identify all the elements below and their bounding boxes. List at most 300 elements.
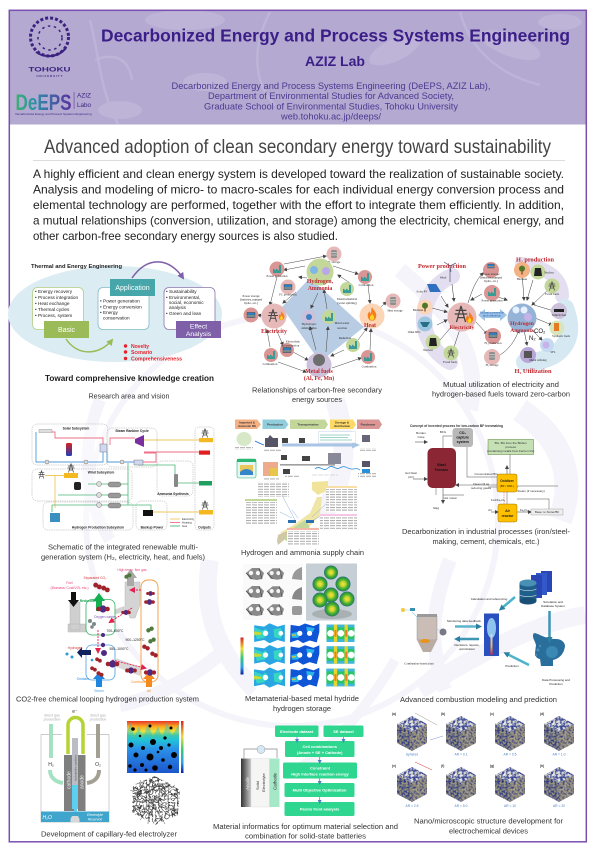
node: power storage: hydro, etc.) — [244, 301, 258, 306]
caption — [252, 386, 382, 404]
subsystem outlines — [32, 424, 214, 530]
process labels: (Air) — [408, 475, 414, 479]
panel: capillary-fed electrolyzer: H₂ — [48, 762, 54, 768]
process labels: Coke — [417, 435, 425, 439]
box: application: • Power generation — [100, 298, 140, 304]
box: CO2 capture system: system — [457, 440, 469, 444]
H2 gas tube — [50, 724, 63, 783]
chevron headers: Production — [267, 422, 283, 426]
labels: direct gas — [90, 714, 106, 718]
annotation lines — [415, 713, 443, 770]
panel: integrated renewable multi-generation schematic — [32, 424, 214, 562]
heading: Concept of invented process for low-carbon BF ironmaking — [410, 424, 503, 428]
node: power generation — [266, 262, 288, 278]
caption: electrochemical devices — [449, 826, 528, 836]
intro paragraph — [33, 167, 564, 243]
box: effect analysis: social, economic — [169, 300, 204, 305]
legend: Electricity — [182, 517, 195, 521]
panel: capillary-fed electrolyzer: H₂O — [42, 815, 52, 821]
panel: capillary-fed electrolyzer: hydrophilic capillary — [74, 754, 78, 781]
labels: direct gas — [44, 714, 60, 718]
node: fossil fuels top — [544, 278, 560, 296]
caption: Metamaterial-based metal hydride — [245, 694, 359, 703]
labels: CO2 and N2: CO₂ — [534, 329, 546, 335]
node: combustion top — [358, 270, 374, 287]
panel: decarbonization in industrial processes — [402, 424, 570, 546]
node: hydrogen ammonia: Ammonia — [308, 286, 332, 292]
box: application: • Energy — [100, 310, 118, 315]
heading: H2 production: H₂ production — [516, 258, 555, 264]
node: thermochemical water splitting: Thermochemical — [337, 297, 357, 301]
node: power generation — [481, 285, 503, 302]
logo: DeEPS AZIZ Labo: DeEPS — [16, 90, 72, 115]
labels: (Biomass/ Coal/VOL etc.) — [50, 586, 89, 590]
node: power storage — [240, 294, 263, 322]
box: basic — [32, 288, 89, 338]
flowchart — [275, 726, 364, 816]
process labels: reducing gases — [471, 486, 492, 490]
caption: energy sources — [292, 395, 342, 404]
supply chain row 1 — [235, 432, 376, 452]
box: blast furnace — [428, 448, 456, 488]
caption: combination for solid-state batteries — [245, 832, 366, 840]
box: CO2 capture system: CO₂ — [459, 431, 467, 435]
process labels: Fe3/Fe₂O₃ — [491, 498, 506, 502]
step: cell combinations — [285, 741, 354, 757]
panel letters: (f) — [441, 764, 444, 768]
step: cell combinations: Cell combinations — [302, 744, 338, 749]
node: metal refining: Metal refining — [529, 358, 547, 362]
box: effect analysis: • Sustainability — [166, 289, 197, 294]
node: hydrotreat: Hydrotropic — [302, 322, 317, 326]
process lines — [413, 442, 531, 512]
labels: Decisions, layouts, — [454, 643, 480, 647]
node: thermochemical water splitting: (water splitting) — [337, 301, 357, 305]
electrodes — [64, 738, 86, 822]
box: oxidizer — [497, 474, 517, 492]
node: biomass: Biomass — [413, 308, 424, 312]
caption: Decarbonization in industrial processes (iron/steel- — [402, 527, 570, 536]
labels: production — [44, 718, 60, 722]
labels: Simulation and — [543, 600, 563, 604]
node: fossil fuels top: Fossil fuels — [545, 292, 560, 296]
text: Tohoku University: UNIVERSITY — [36, 74, 63, 78]
colour bar — [240, 638, 244, 674]
panel letters: (e) — [392, 764, 396, 768]
aspect ratio labels: AR = 0.1 — [455, 752, 468, 756]
panel: metamaterial-based metal hydride storage — [240, 564, 359, 713]
process labels: Clean Oil as — [473, 482, 490, 486]
node: combustion left: Combustion — [263, 362, 278, 366]
affiliation text: Graduate School of Environmental Studies, Tohoku University — [204, 101, 458, 111]
step: constraints: High interface reaction energy — [291, 772, 350, 776]
panel: CO2-free chemical looping hydrogen production — [16, 568, 199, 704]
node: wind: Wind — [440, 276, 447, 280]
node: hydrogen ammonia — [306, 258, 334, 292]
panel: mutual utilization of electricity and hydrogen — [408, 258, 571, 398]
box: reduction reactor — [86, 600, 115, 635]
node: biomass top — [514, 262, 530, 281]
node: hydrogen ammonia: Hydrogen, — [307, 279, 334, 285]
box: application: conservation — [103, 316, 130, 320]
subsystem titles: Hydrogen Production Subsystem — [72, 526, 124, 530]
heading: power production: Power production — [418, 264, 467, 270]
step: constraints — [283, 762, 357, 778]
labels: optimization — [459, 647, 475, 651]
node: electricity: Electricity — [261, 329, 287, 335]
reactors — [68, 582, 141, 672]
caption: Schematic of the integrated renewable multi- — [48, 542, 198, 552]
flame simulation — [484, 614, 499, 656]
chevron headers: Storage & — [335, 420, 350, 424]
node: vehicle fuel: Vehicle fuel — [552, 313, 566, 317]
arrow: basic to application — [66, 339, 112, 352]
box: CO2 capture system: capture — [456, 436, 469, 440]
fibre network render — [130, 776, 180, 825]
caption: Development of capillary-fed electrolyzer — [41, 830, 177, 838]
process labels: Hot metal — [444, 496, 457, 500]
aspect ratio labels: AR = 20 — [553, 804, 565, 808]
caption: generation system (H₂, electricity, heat, and fuels) — [41, 552, 205, 562]
node: H2 production: H₂ production — [485, 341, 502, 345]
logo: DeEPS AZIZ Labo: Labo — [77, 103, 92, 109]
labels: 900–1200°C — [126, 638, 145, 642]
node: nuclear: Nuclear — [423, 348, 433, 352]
caption — [245, 694, 359, 713]
step: multi objective optimization: Multi Objective Optimization — [293, 788, 347, 792]
step: constraints: Constraint — [310, 766, 331, 770]
caption: Material informatics for optimum material selection and — [213, 822, 398, 831]
node: SFL: SFL — [550, 350, 556, 354]
box: BG / BG source — [487, 440, 534, 454]
map of Japan — [277, 481, 330, 545]
labels: Hydrogen — [68, 646, 82, 650]
box: effect analysis: analysis — [169, 305, 187, 310]
list: novelty scenario comprehensiveness: Scenario — [131, 350, 152, 356]
intro paragraph: a mutual relationships (conversion, utilization, and storage) among the electricity, chemical energy, and — [33, 213, 564, 227]
icon: Tohoku University emblem — [30, 18, 68, 56]
lab name: AZIZ Lab — [305, 54, 365, 69]
chevron headers — [235, 420, 382, 429]
box: application: • Energy conversion — [100, 304, 142, 310]
chevron headers: Imported & — [239, 420, 256, 424]
caption: making, cement, chemicals, etc.) — [432, 537, 540, 546]
node: synthetic fuels: Synthetic fuels — [552, 334, 571, 338]
node: H2 storage: H₂ storage — [328, 260, 341, 264]
node: electricity: Electricity — [450, 325, 475, 331]
node: metal refining — [520, 347, 547, 363]
node: synthetic fuels — [550, 320, 571, 338]
arrow: mutual conversion and utilization: and utilization — [483, 314, 501, 318]
labels: 550–1000°C — [110, 647, 129, 651]
arrow: mutual conversion and utilization: Mutual conversion — [480, 310, 504, 314]
labels: Separated CO₂ — [84, 576, 107, 580]
O2 gas tube — [87, 724, 99, 783]
labels — [50, 568, 152, 693]
panel: advanced combustion modeling and prediction — [400, 571, 570, 704]
node: metal-water reaction: reaction — [337, 326, 347, 330]
node: biomass top: Biomass — [517, 277, 528, 281]
node: H2 production — [485, 328, 502, 345]
box: BG / BG source: process — [505, 445, 516, 449]
stress simulation render — [306, 564, 357, 620]
step: cell combinations: (Anode + SE + Cathode) — [297, 750, 343, 755]
box: basic: • Thermal cycles — [35, 307, 70, 312]
battery schematic — [241, 746, 280, 807]
labels: Combustion — [131, 680, 149, 684]
database icon — [520, 571, 552, 604]
caption: hydrogen-based fuels toward zero-carbon — [432, 390, 570, 398]
box: effect analysis: Effect — [190, 324, 207, 330]
aspect ratio labels: AR = 2.5 — [406, 804, 419, 808]
process labels — [405, 430, 545, 512]
aspect ratio labels: AR = 10 — [504, 804, 516, 808]
box: basic: Basic — [58, 327, 76, 334]
molecules — [66, 573, 158, 677]
affiliation text: Decarbonized Energy and Process Systems Engineering (DeEPS, AZIZ Lab), — [172, 81, 490, 91]
caption: Hydrogen and ammonia supply chain — [241, 548, 364, 557]
panel: nano/microscopic structure development — [392, 712, 574, 836]
subsystem titles: Steam Rankine Cycle — [115, 429, 149, 433]
labels: Calculation and referencing — [471, 597, 508, 601]
node: power generation: Power generation — [266, 274, 288, 278]
chevron headers: Transportation — [297, 422, 319, 426]
process labels: Slag — [433, 506, 439, 510]
panel letters: (a) — [392, 712, 396, 716]
node: metal-water reaction: Metal-water — [335, 321, 349, 325]
aspect ratio labels — [406, 752, 566, 808]
box: effect analysis: • Environmental, — [166, 295, 200, 300]
affiliation text — [172, 81, 490, 122]
node: combustion right — [361, 350, 377, 368]
legend: Gas — [182, 524, 188, 528]
panel letters — [392, 712, 544, 768]
labels: Air — [147, 689, 152, 693]
process labels: Hot blast — [405, 471, 417, 475]
node: nuclear top — [530, 264, 554, 280]
box: air reactor: reactor — [502, 514, 514, 518]
caption: Advanced combustion modeling and prediction — [400, 695, 557, 704]
labels: High temp. flue gas — [117, 568, 147, 572]
box: basic: • Heat exchange — [35, 301, 70, 306]
intro paragraph: A highly efficient and clean energy system is developed toward the realization of sustainable society. — [33, 167, 564, 181]
panel: capillary-fed electrolyzer: e⁻ — [72, 709, 78, 715]
box: air reactor — [498, 504, 517, 522]
node: electrolytic fuel production: Electrolytic — [286, 340, 301, 344]
node: power storage: (batteries, pumped — [480, 276, 503, 280]
node: combustion right: Combustion — [362, 364, 377, 368]
labels: Reduction — [80, 599, 96, 603]
subsystem titles: Ammonia Synthesis — [157, 492, 189, 496]
chevron headers: Purchaser — [361, 422, 376, 426]
chevron headers: domestic RE — [238, 424, 256, 428]
node: FC production — [279, 280, 297, 296]
caption: hydrogen storage — [273, 704, 331, 713]
panel: capillary-fed electrolyzer: Electrolyte — [87, 813, 103, 817]
box: application: Application — [115, 285, 150, 292]
node: fossil fuels — [443, 346, 458, 364]
process labels: Burden — [416, 431, 426, 435]
process labels: Fe₂O₃ — [520, 508, 529, 512]
step: SE dataset: SE dataset — [333, 729, 354, 734]
labels: Prediction — [505, 664, 519, 668]
yellow-green conductor — [68, 718, 83, 754]
node: electricity — [448, 302, 476, 332]
list: novelty scenario comprehensiveness — [124, 344, 182, 362]
node: power storage: Power storage — [482, 272, 500, 276]
node: SFL — [540, 338, 556, 354]
step: pareto front analysis: Pareto front analysis — [300, 806, 340, 812]
chevron headers: distribution — [334, 424, 350, 428]
subsystem titles: Wind Subsystem — [88, 470, 114, 474]
panel: capillary-fed electrolyzer: anode — [80, 775, 86, 789]
arrow: mutual conversion and utilization — [478, 309, 507, 321]
intro paragraph: Analysis and modeling of micro- to macro-scales for each individual energy conversion process and — [33, 182, 564, 196]
panel: carbon-free secondary energy relationships — [240, 246, 403, 404]
node: electrolytic fuel production — [280, 340, 301, 357]
tank outline — [41, 734, 109, 822]
flow arrows — [297, 737, 344, 802]
node: solar PV — [417, 284, 441, 294]
gas lines — [52, 463, 199, 512]
box: BG / BG source: BG, BG from the Bishen — [495, 441, 527, 445]
node: hydrotreat: aldehydrides — [301, 326, 317, 330]
caption: Relationships of carbon-free secondary — [252, 386, 382, 394]
node: wind — [440, 262, 456, 282]
caption — [414, 816, 563, 836]
labels: Monitoring data feedback — [447, 619, 481, 623]
panel letters: (d) — [540, 712, 544, 716]
node: heat — [360, 304, 384, 329]
legend: Heating — [182, 520, 192, 524]
node: metal fuels: (Al, Fe, Mn) — [304, 375, 334, 382]
node: power storage: hydro, etc.) — [484, 279, 498, 284]
electricity lines — [45, 440, 199, 512]
legend — [170, 517, 195, 528]
head icon — [533, 633, 565, 666]
box: base to sinter — [531, 509, 563, 515]
box: combustor — [141, 580, 158, 682]
background bands — [424, 264, 569, 362]
box: effect analysis — [164, 288, 221, 338]
text: Tohoku University — [28, 66, 71, 78]
box: blast furnace: Blast — [437, 463, 447, 467]
node: nuclear — [423, 334, 440, 352]
labels: CO2 and N2 — [529, 329, 546, 342]
connection arrows — [258, 256, 386, 372]
aspect ratio labels: AR = 0.5 — [504, 752, 517, 756]
node: hydrogen ammonia — [508, 304, 536, 334]
box: basic: • Process integration — [35, 295, 78, 300]
node: power generation: Power generation — [481, 298, 503, 302]
logo: DeEPS AZIZ Labo: Decarbonized Energy and Process Systems Engineering — [16, 113, 92, 116]
box: CO2 capture system — [452, 428, 473, 447]
panel letters: (b) — [441, 712, 445, 716]
node: reduction: Reduction — [339, 336, 352, 340]
affiliation text: web.tohoku.ac.jp/deeps/ — [280, 112, 381, 122]
labels: CO2 and N2: N₂ — [529, 336, 536, 342]
caption — [41, 542, 205, 562]
box: effect analysis: Analysis — [186, 331, 212, 338]
node: metal fuels — [304, 352, 334, 382]
arrows — [455, 597, 550, 665]
box: air reactor: Air — [505, 509, 511, 513]
battery schematic: Cathode — [272, 772, 278, 790]
caption: Research area and vision — [88, 392, 170, 400]
caption — [432, 380, 570, 398]
panel letters: (c) — [490, 712, 494, 716]
box: application — [98, 279, 155, 330]
intro paragraph: elemental technology are performed, together with the effort to integrate them efficiently. In addition, — [33, 198, 564, 212]
node: H2 storage — [326, 246, 342, 264]
list: novelty scenario comprehensiveness: Comprehensiveness — [131, 356, 182, 362]
panel: capillary-fed electrolyzer: O₂ — [95, 762, 101, 768]
node: hydrogen ammonia: Hydrogen — [510, 321, 535, 327]
aspect ratio labels: AR = 1.0 — [553, 752, 566, 756]
caption — [213, 822, 398, 840]
node: biomass — [413, 300, 432, 314]
labels: Prediction — [549, 682, 563, 686]
process labels: Air — [488, 508, 492, 512]
water pipes — [36, 432, 134, 462]
labels: Data Processing and — [542, 678, 570, 682]
heading: H2 utilization: H₂ Utilization — [514, 369, 552, 375]
node: electrolytic fuel production: fuel production — [281, 344, 300, 348]
affiliation text: Department of Environmental Studies for Advanced Society, — [208, 91, 454, 101]
intro paragraph: other carbon-free secondary energy sources is also studied. — [33, 229, 338, 243]
box: blast furnace: Furnace — [435, 468, 448, 472]
node: thermochemical water splitting — [337, 282, 357, 305]
caption — [402, 527, 570, 546]
node: FC production: FC production — [279, 292, 297, 296]
panel: capillary-fed electrolyzer — [41, 709, 184, 838]
process labels: BFG — [440, 430, 447, 434]
panel letters: (g) — [490, 764, 494, 768]
lattice renders — [243, 564, 303, 620]
box: basic: • Energy recovery — [35, 289, 73, 294]
caption: Mutual utilization of electricity and — [443, 380, 559, 389]
panel letters: (h) — [540, 764, 544, 768]
text: Tohoku University: TOHOKU — [28, 66, 71, 74]
panel: research area and vision — [8, 262, 222, 400]
combustion plant: Combustion-based plant — [404, 662, 434, 666]
components — [38, 428, 208, 522]
supply chain row 2 — [237, 453, 376, 480]
main title: Decarbonized Energy and Process Systems Engineering — [101, 26, 570, 46]
aspect ratio labels: AR = 5.0 — [455, 804, 468, 808]
process labels: Steam (if necessary) — [517, 489, 545, 493]
node: metal fuels: Metal fuels — [305, 369, 334, 375]
node: heat: Heat — [364, 323, 376, 329]
heating pipes — [43, 432, 199, 462]
connection arrows — [432, 272, 554, 358]
node: vehicle fuel — [551, 303, 567, 319]
labels: Database System — [541, 604, 565, 608]
node: heat storage — [386, 294, 403, 312]
node: other REs: Other REs — [408, 330, 421, 334]
electrolyte reservoir — [41, 812, 109, 822]
subsystem titles — [63, 426, 211, 530]
labels: Oxidizer — [77, 677, 90, 681]
watermark background — [86, 270, 585, 775]
heading: thermal and energy engineering: Thermal and Energy Engineering — [31, 264, 123, 270]
node: solar PV: Solar PV — [417, 290, 428, 294]
subsystem titles: Solar Subsystem — [63, 426, 89, 430]
caption: CO2-free chemical looping hydrogen production system — [16, 694, 199, 704]
combustion plant — [401, 608, 446, 666]
node: combustion left — [263, 348, 278, 366]
node: combustion top: Combustion — [359, 283, 374, 287]
